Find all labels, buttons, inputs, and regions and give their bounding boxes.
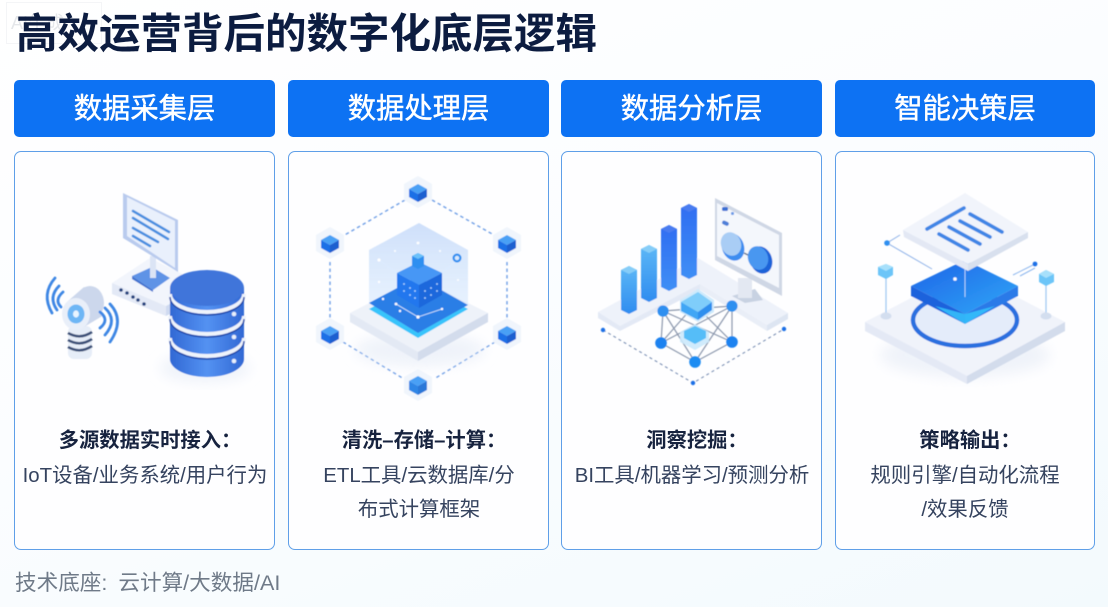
text block: 数据处理层: 清洗–存储–计算： bbox=[342, 430, 506, 452]
panel: 智能决策层 card bbox=[835, 151, 1095, 550]
icon: hex node upper right bbox=[493, 227, 521, 259]
text block: 数据分析层 bbox=[575, 429, 809, 487]
illustration: data processing hexagon bbox=[316, 176, 521, 401]
illustration: analytics bars, monitor and network bbox=[598, 198, 788, 385]
footer note: 技术底座 云计算/大数据/AI bbox=[15, 570, 280, 595]
header: 数据分析层 bbox=[561, 80, 822, 137]
watermark bbox=[6, 2, 102, 44]
title: 高效运营背后的数字化底层逻辑 bbox=[16, 10, 597, 57]
icon: blue decision plate bbox=[911, 260, 1018, 324]
icon: hex node lower left bbox=[316, 318, 344, 350]
text block: 数据处理层: ETL工具/云数据库/分 bbox=[323, 465, 515, 487]
text block: 数据处理层 bbox=[323, 429, 515, 521]
header: 数据分析层: 数据分析层 bbox=[621, 92, 762, 124]
dashed hexagon links bbox=[330, 200, 507, 379]
text block: 智能决策层: 策略输出： bbox=[919, 430, 1021, 452]
icon: hex node lower right bbox=[493, 318, 521, 350]
header: 数据处理层 bbox=[288, 80, 549, 137]
dashed diamond base bbox=[601, 327, 786, 385]
illustration: sensor, monitor and database bbox=[47, 193, 250, 382]
text block: 智能决策层: /效果反馈 bbox=[921, 499, 1009, 521]
watermark: AI生成 bbox=[11, 13, 64, 33]
icon: wireless sensor bbox=[47, 278, 117, 359]
text block: 数据采集层: 多源数据实时接入： bbox=[59, 430, 241, 452]
icon: hex node top bbox=[404, 176, 432, 208]
illustration: decision engine platform bbox=[865, 193, 1065, 384]
text block: 数据分析层: 洞察挖掘： bbox=[646, 430, 748, 452]
text block: 智能决策层 bbox=[870, 429, 1060, 521]
text block: 数据处理层: 布式计算框架 bbox=[358, 499, 480, 521]
icon: hex node bottom bbox=[404, 369, 432, 401]
panel: 数据处理层 card bbox=[288, 151, 549, 550]
neural network cluster bbox=[655, 289, 738, 368]
header: 数据采集层 bbox=[14, 80, 275, 137]
text block: 数据采集层 bbox=[23, 429, 267, 487]
panel: 数据分析层 card bbox=[561, 151, 822, 550]
header: 智能决策层 bbox=[835, 80, 1095, 137]
text block: 数据采集层: IoT设备/业务系统/用户行为 bbox=[23, 465, 267, 487]
footer note: : bbox=[101, 570, 107, 595]
header: 智能决策层: 智能决策层 bbox=[894, 92, 1036, 124]
panel: 数据采集层 card bbox=[14, 151, 275, 550]
icon: cube beacon left bbox=[878, 264, 893, 320]
text block: 数据分析层: BI工具/机器学习/预测分析 bbox=[575, 465, 809, 487]
icon: cube beacon right bbox=[1039, 270, 1054, 320]
text block: 智能决策层: 规则引擎/自动化流程 bbox=[870, 465, 1060, 487]
icon: floating document card bbox=[903, 193, 1028, 271]
monitor with charts bbox=[715, 198, 782, 303]
icon: router base with monitor bbox=[112, 193, 205, 316]
icon: database cylinder bbox=[170, 270, 244, 377]
header: 数据采集层: 数据采集层 bbox=[74, 92, 215, 124]
base platform bbox=[865, 270, 1065, 384]
icon: connector lines and dots bbox=[884, 235, 1037, 276]
header: 数据处理层: 数据处理层 bbox=[348, 92, 489, 124]
L-shaped platform bbox=[598, 258, 788, 331]
bar chart bbox=[621, 204, 697, 314]
icon: hex node upper left bbox=[316, 227, 344, 259]
centre server platform bbox=[350, 223, 488, 366]
decision ring bbox=[913, 294, 1017, 346]
